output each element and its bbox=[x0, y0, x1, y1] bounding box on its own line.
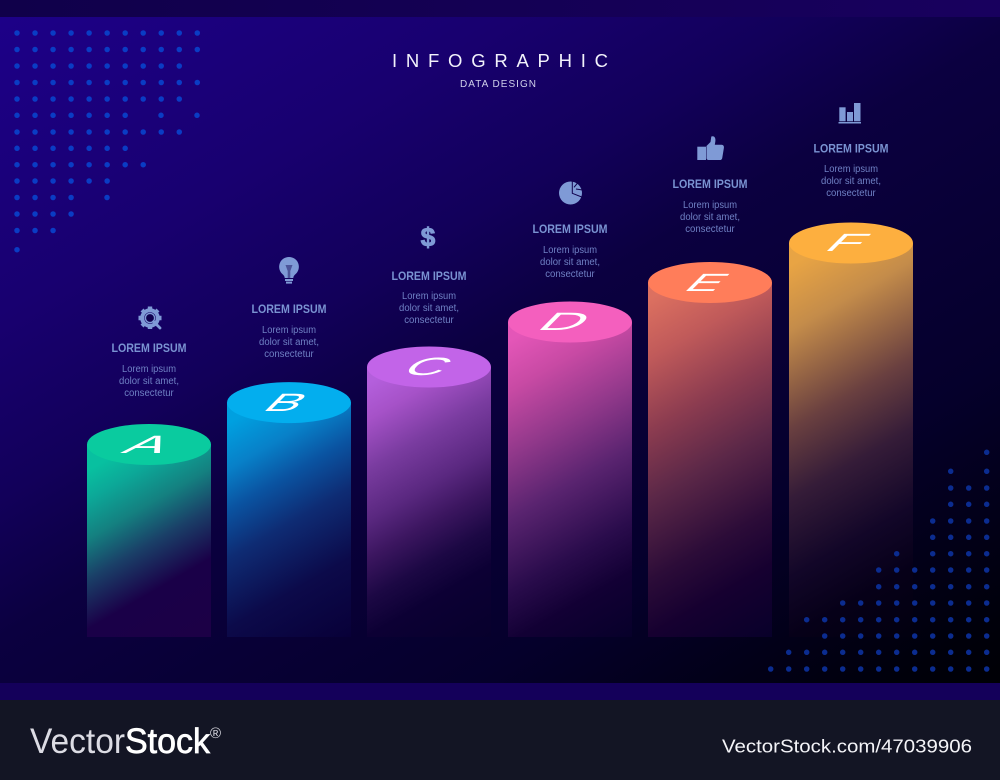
icon: bar chart bbox=[838, 103, 861, 124]
cylinder B body bbox=[227, 403, 351, 637]
dot pattern: top left bbox=[17, 33, 198, 250]
letter A: A bbox=[114, 431, 183, 459]
body text E: dolor sit amet, bbox=[680, 212, 740, 223]
column B bbox=[227, 257, 351, 637]
body text C: dolor sit amet, bbox=[399, 303, 459, 314]
title: INFOGRAPHIC bbox=[392, 50, 608, 71]
icon: light bulb bbox=[279, 257, 299, 284]
letter F: F bbox=[817, 228, 879, 256]
body text D: Lorem ipsum bbox=[543, 245, 597, 256]
cylinder F top bbox=[789, 222, 913, 264]
body text B: consectetur bbox=[264, 349, 314, 360]
top band bbox=[0, 0, 1000, 17]
heading A: LOREM IPSUM bbox=[112, 341, 186, 355]
body text E: Lorem ipsum bbox=[683, 200, 737, 211]
body text D: consectetur bbox=[545, 269, 595, 280]
footer logo: ® bbox=[210, 725, 221, 742]
body text B bbox=[259, 325, 319, 360]
body text F: dolor sit amet, bbox=[821, 176, 881, 187]
cylinder C body bbox=[367, 367, 491, 637]
footer logo: Vector bbox=[30, 722, 125, 761]
heading C: LOREM IPSUM bbox=[392, 269, 466, 283]
footer logo bbox=[30, 722, 221, 761]
body text A: consectetur bbox=[124, 388, 174, 399]
column A bbox=[87, 306, 211, 637]
column C bbox=[367, 222, 491, 637]
dot pattern: bottom right bbox=[771, 452, 988, 669]
lower band bbox=[0, 683, 1000, 700]
cylinder A top bbox=[87, 424, 211, 465]
letter C: C bbox=[395, 352, 462, 380]
icon: pie chart bbox=[559, 181, 583, 204]
cylinder E top bbox=[648, 262, 772, 303]
body text A: Lorem ipsum bbox=[122, 364, 176, 375]
footer id: VectorStock.com/47039906 bbox=[722, 736, 972, 756]
cylinder E body bbox=[648, 282, 772, 637]
body text A bbox=[119, 364, 179, 399]
heading E: LOREM IPSUM bbox=[672, 177, 748, 191]
column F bbox=[789, 103, 913, 637]
cylinder C top bbox=[367, 346, 491, 388]
letter B: B bbox=[255, 389, 317, 417]
body text E bbox=[680, 200, 740, 235]
body text C: consectetur bbox=[404, 315, 454, 326]
letter D: D bbox=[529, 308, 601, 336]
body text C bbox=[399, 291, 459, 326]
body text D bbox=[540, 245, 600, 280]
body text F bbox=[821, 164, 881, 199]
body text B: Lorem ipsum bbox=[262, 325, 316, 336]
body text A: dolor sit amet, bbox=[119, 376, 179, 387]
column D bbox=[508, 181, 632, 637]
footer bar bbox=[0, 700, 1000, 780]
icon: dollar: $ bbox=[421, 222, 436, 252]
cylinder A body bbox=[87, 444, 211, 637]
icon: gear with magnifier bbox=[138, 306, 162, 329]
body text C: Lorem ipsum bbox=[402, 291, 456, 302]
cylinder D body bbox=[508, 322, 632, 637]
body text B: dolor sit amet, bbox=[259, 337, 319, 348]
cylinder D top bbox=[508, 302, 632, 342]
heading D: LOREM IPSUM bbox=[532, 222, 608, 236]
footer logo: Stock bbox=[125, 722, 210, 761]
column E bbox=[648, 136, 772, 637]
icon: thumbs up bbox=[697, 136, 724, 160]
subtitle: DATA DESIGN bbox=[460, 79, 536, 90]
heading F: LOREM IPSUM bbox=[814, 142, 888, 156]
body text F: Lorem ipsum bbox=[824, 164, 878, 175]
body text E: consectetur bbox=[685, 224, 735, 235]
body text D: dolor sit amet, bbox=[540, 257, 600, 268]
cylinder B top bbox=[227, 382, 351, 423]
body text F: consectetur bbox=[826, 188, 876, 199]
letter E: E bbox=[676, 269, 737, 297]
cylinder F body bbox=[789, 243, 913, 637]
heading B: LOREM IPSUM bbox=[252, 302, 326, 316]
